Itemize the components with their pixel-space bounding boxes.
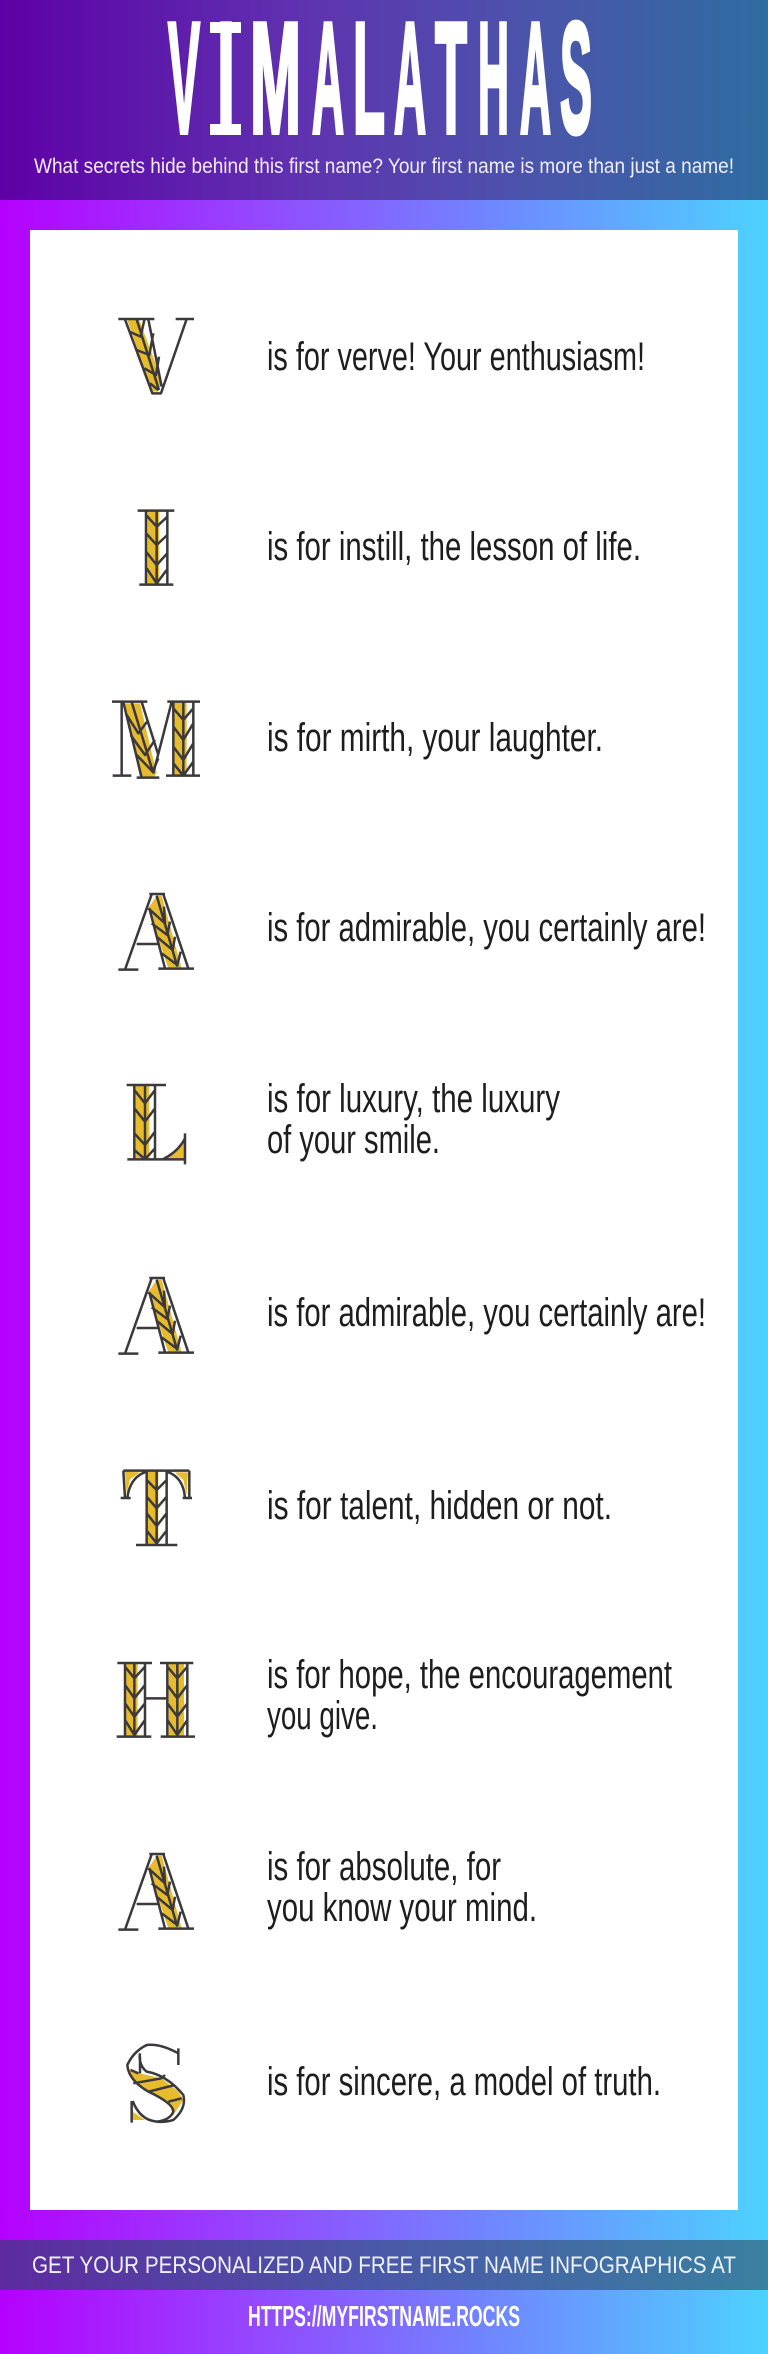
header band bbox=[0, 0, 768, 200]
text: you give. bbox=[267, 1694, 378, 1738]
text: is for talent, hidden or not. bbox=[267, 1484, 612, 1528]
row: V bbox=[118, 319, 645, 393]
icon: letter M bbox=[112, 702, 200, 778]
title bbox=[168, 0, 592, 166]
text: of your smile. bbox=[267, 1118, 440, 1162]
row: I bbox=[138, 511, 641, 585]
text: is for mirth, your laughter. bbox=[267, 716, 603, 760]
row: H bbox=[117, 1653, 672, 1738]
text: you know your mind. bbox=[267, 1886, 537, 1930]
icon: letter A bbox=[118, 894, 194, 970]
row: L bbox=[127, 1077, 560, 1164]
icon: letter T bbox=[121, 1471, 192, 1545]
icon: letter A bbox=[118, 1278, 194, 1354]
row: A bbox=[118, 894, 706, 970]
icon: letter A bbox=[118, 1854, 194, 1930]
icon: letter L bbox=[127, 1085, 185, 1164]
row: A bbox=[118, 1278, 706, 1354]
text: is for instill, the lesson of life. bbox=[267, 525, 641, 569]
footer band bbox=[0, 2240, 768, 2290]
text: is for absolute, for bbox=[267, 1845, 501, 1889]
row: M bbox=[112, 702, 603, 778]
icon: letter S bbox=[127, 2045, 184, 2123]
row: T bbox=[121, 1471, 612, 1545]
row: A bbox=[118, 1845, 537, 1930]
icon: letter H bbox=[117, 1663, 195, 1737]
text: is for luxury, the luxury bbox=[267, 1077, 560, 1121]
row: S bbox=[127, 2045, 661, 2123]
footer url: HTTPS://MYFIRSTNAME.ROCKS bbox=[248, 2301, 520, 2333]
icon: letter V bbox=[118, 319, 194, 393]
white content panel bbox=[30, 230, 738, 2210]
icon: letter I bbox=[138, 511, 174, 585]
